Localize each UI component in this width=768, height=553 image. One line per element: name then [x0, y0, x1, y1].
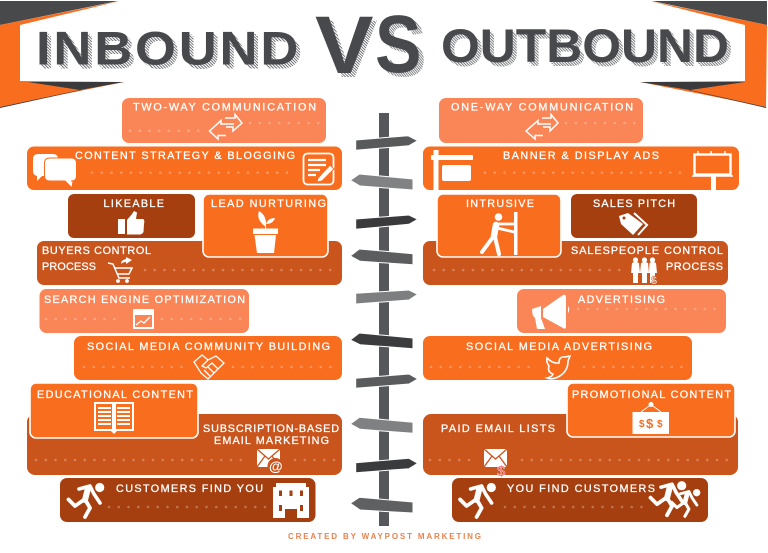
icon: billboard — [692, 151, 733, 190]
icon: person pushing door — [482, 212, 518, 255]
panel: one-way communication: ONE-WAY COMMUNICATION — [451, 102, 633, 114]
icon: hanging price sign: $ — [646, 416, 654, 431]
title: vs: V — [319, 3, 378, 94]
icon: salespeople: $ — [651, 275, 657, 287]
icon: speech bubbles — [33, 154, 76, 188]
panel: sales pitch: SALES PITCH — [593, 198, 675, 210]
icon: browser chart — [133, 309, 154, 329]
icon: office building — [273, 483, 309, 518]
panel: two-way communication — [122, 98, 326, 143]
panel: paid email lists: PAID EMAIL LISTS — [441, 423, 555, 435]
icon: envelope and at sign: @ — [269, 458, 283, 474]
icon: envelope with dollar: $ — [497, 463, 506, 480]
icon: hanging price sign: $ — [657, 419, 663, 430]
icon: twitter bird — [547, 356, 570, 379]
icon: thumbs up — [118, 211, 144, 235]
panel: search engine optimization: SEARCH ENGINE OPTIMIZATION — [44, 294, 245, 306]
panel: salespeople control process — [423, 241, 728, 287]
title: inbound: INBOUND — [36, 22, 301, 75]
panel: social media community building — [74, 336, 342, 380]
icon: envelope and at sign — [257, 449, 284, 474]
panel: subscription-based email marketing: EMAIL MARKETING — [214, 435, 329, 447]
panel: banner and display ads — [423, 146, 739, 190]
panel: social media advertising: SOCIAL MEDIA ADVERTISING — [466, 341, 652, 353]
icon: runner — [68, 483, 104, 517]
panel: advertising — [517, 289, 726, 333]
icon: arrows — [526, 114, 558, 139]
panel: intrusive: INTRUSIVE — [466, 198, 534, 210]
panel: subscription-based email marketing: SUBSCRIPTION-BASED — [203, 423, 339, 435]
icon: price tags — [619, 213, 647, 235]
panel: educational content — [30, 383, 198, 438]
panel: salespeople control process: SALESPEOPLE CONTROL — [571, 245, 723, 257]
icon: two runners — [650, 481, 700, 516]
panel: lead nurturing — [203, 194, 328, 257]
title: outbound: OUTBOUND — [441, 19, 729, 72]
panel: subscription-based email marketing — [27, 414, 342, 475]
icon: hanging price sign — [632, 402, 669, 434]
header banner: inbound — [0, 1, 124, 108]
title: vs: S — [375, 0, 421, 90]
panel: content strategy: CONTENT STRATEGY & BLOGGING — [75, 150, 295, 162]
icon: shopping cart — [108, 257, 132, 283]
panel: buyers control process — [37, 241, 342, 285]
title: vs: V — [315, 0, 374, 90]
icon: runner — [460, 483, 496, 517]
title: inbound: INBOUND — [40, 26, 305, 79]
signpost — [350, 113, 418, 526]
panel: likeable — [68, 194, 195, 238]
header banner: outbound — [640, 1, 767, 108]
panel: one-way communication — [439, 98, 643, 143]
icon: megaphone — [532, 295, 569, 329]
footer credit: CREATED BY WAYPOST MARKETING — [288, 532, 481, 541]
panel: banner and display ads: BANNER & DISPLAY ADS — [503, 150, 659, 162]
title: inbound: INBOUND — [38, 24, 303, 77]
icon: hanging price sign: $ — [639, 419, 645, 430]
panel: lead nurturing: LEAD NURTURING — [211, 198, 326, 210]
panel: paid email lists — [423, 414, 738, 480]
title: outbound: OUTBOUND — [445, 23, 733, 76]
panel: search engine optimization — [40, 289, 249, 333]
panel: content strategy — [27, 146, 342, 190]
panel: educational content: EDUCATIONAL CONTENT — [37, 389, 193, 401]
icon: notepad and pencil — [304, 154, 334, 184]
icon: potted plant — [253, 211, 278, 253]
panel: you find customers — [452, 478, 708, 522]
panel: buyers control process: BUYERS CONTROL — [42, 245, 151, 257]
panel: social media community building: SOCIAL MEDIA COMMUNITY BUILDING — [87, 341, 330, 353]
title: outbound: OUTBOUND — [443, 21, 731, 74]
icon: handshake — [194, 355, 224, 379]
panel: you find customers: YOU FIND CUSTOMERS — [507, 483, 655, 495]
panel: customers find you: CUSTOMERS FIND YOU — [116, 483, 263, 495]
panel: advertising: ADVERTISING — [578, 294, 665, 306]
panel: buyers control process: PROCESS — [42, 261, 96, 273]
title: vs: S — [380, 3, 426, 94]
panel: promotional content: PROMOTIONAL CONTENT — [572, 389, 731, 401]
icon: open book — [95, 403, 133, 434]
panel: two-way communication: TWO-WAY COMMUNICATION — [133, 102, 316, 114]
icon: salespeople — [631, 257, 657, 287]
panel: salespeople control process: PROCESS — [666, 261, 723, 273]
panel: likeable: LIKEABLE — [104, 198, 164, 210]
panel: customers find you — [60, 478, 316, 522]
panel: intrusive — [437, 194, 561, 257]
panel: social media advertising — [423, 336, 692, 380]
panel: sales pitch — [571, 194, 697, 238]
icon: envelope with dollar — [484, 449, 507, 480]
icon: two-way arrows — [210, 114, 242, 139]
title: vs — [315, 0, 426, 94]
icon: hanging sign — [431, 150, 473, 190]
panel: promotional content — [567, 383, 735, 437]
